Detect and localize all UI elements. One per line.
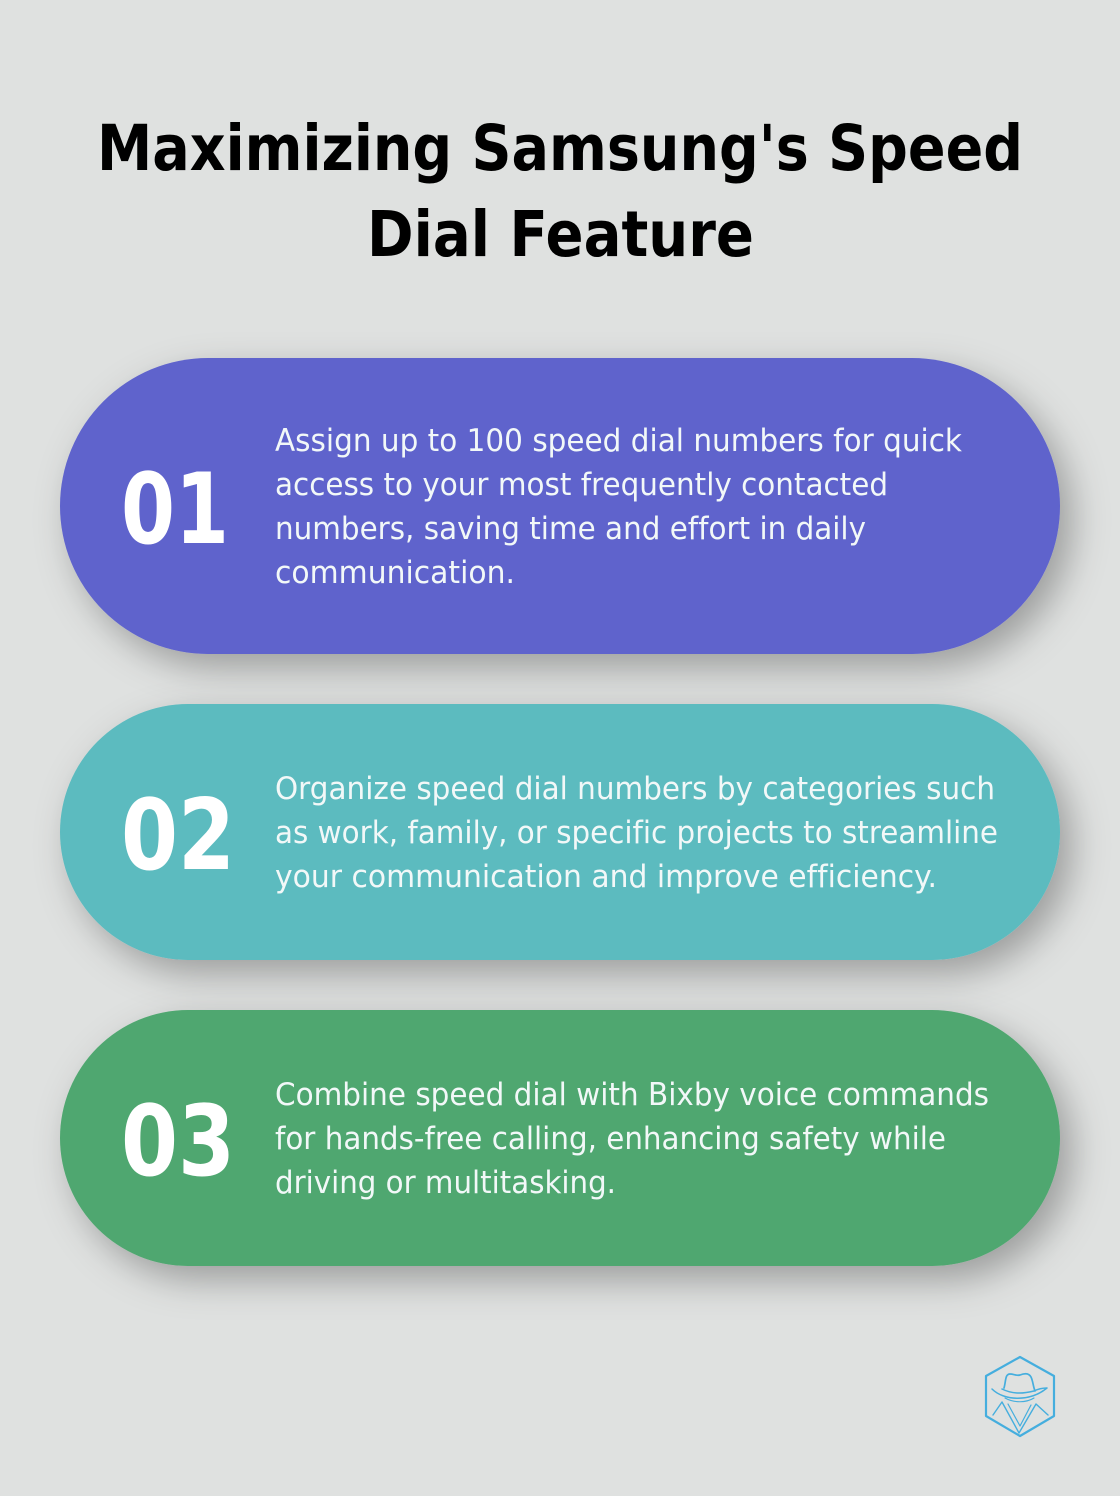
pill background 01 xyxy=(60,358,1060,654)
title: Dial Feature xyxy=(367,198,754,271)
text block 02 xyxy=(275,771,998,895)
text block 01: Assign up to 100 speed dial numbers for quick xyxy=(275,423,963,459)
text block 02: as work, family, or specific projects to streamline xyxy=(275,815,998,851)
text block 03 xyxy=(275,1077,989,1201)
text block 01: numbers, saving time and effort in daily xyxy=(275,511,866,547)
panel: step 02 xyxy=(60,704,1060,960)
panel: step 03 xyxy=(60,1010,1060,1266)
number 03: 03 xyxy=(121,1085,235,1199)
text block 03: for hands-free calling, enhancing safety while xyxy=(275,1121,946,1157)
number 01: 01 xyxy=(121,453,229,567)
icon: hexagon spy logo xyxy=(986,1357,1054,1436)
number 02: 02 xyxy=(121,779,235,893)
text block 01: access to your most frequently contacted xyxy=(275,467,888,503)
panel: step 01 xyxy=(60,358,1060,654)
text block 03: driving or multitasking. xyxy=(275,1165,616,1201)
title xyxy=(97,112,1023,271)
title: Maximizing Samsung's Speed xyxy=(97,112,1023,185)
text block 02: Organize speed dial numbers by categories such xyxy=(275,771,995,807)
text block 01: communication. xyxy=(275,555,515,591)
text block 01 xyxy=(275,423,963,591)
text block 03: Combine speed dial with Bixby voice commands xyxy=(275,1077,989,1113)
text block 02: your communication and improve efficiency. xyxy=(275,859,937,895)
pill background 02 xyxy=(60,704,1060,960)
pill background 03 xyxy=(60,1010,1060,1266)
